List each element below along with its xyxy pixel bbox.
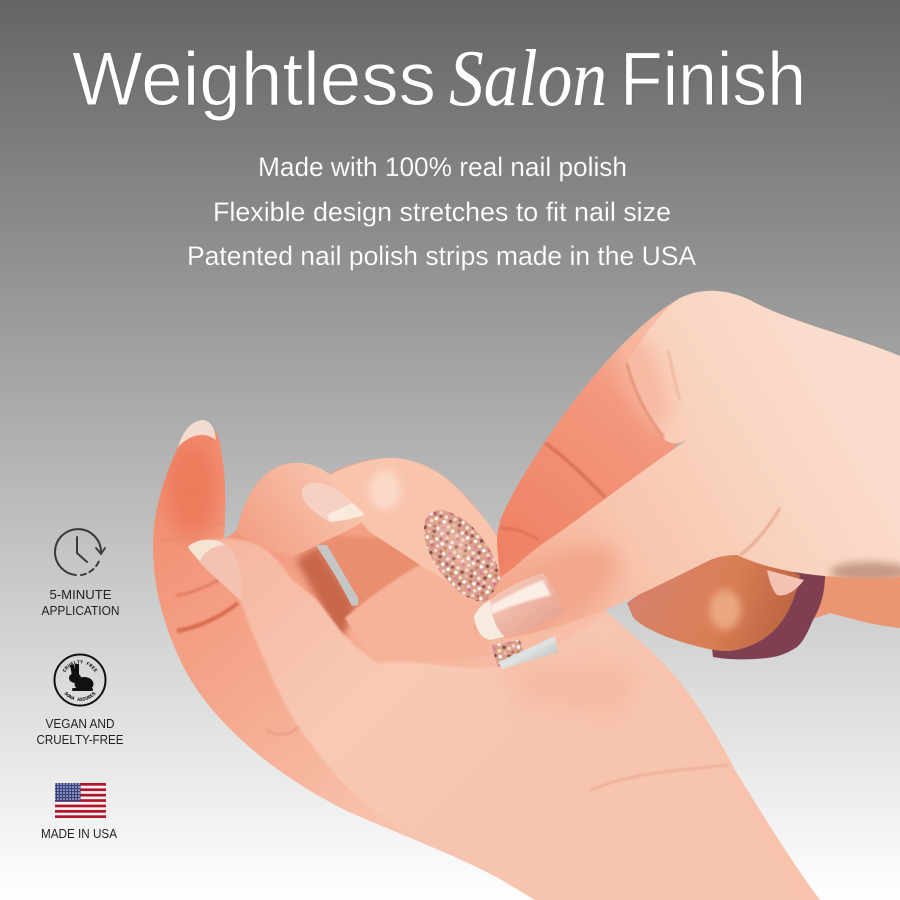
icon: American flag bbox=[55, 783, 106, 818]
front fingernail bbox=[188, 540, 241, 601]
silver nail strip bbox=[491, 636, 558, 669]
icon: cruelty-free rabbit badge: SONA ASSURES bbox=[64, 692, 96, 702]
curled finger bbox=[237, 463, 365, 557]
label: 5-minute application: 5-MINUTE bbox=[50, 587, 112, 602]
palm mound bbox=[345, 562, 495, 668]
title: Salon bbox=[449, 35, 607, 123]
upper hand back and thumb bbox=[474, 291, 900, 653]
label: made in USA: MADE IN USA bbox=[41, 826, 117, 841]
lower hand silhouette bbox=[153, 420, 820, 900]
glitter nail bbox=[409, 497, 515, 615]
icon: cruelty-free rabbit badge: CRUELTY FREE bbox=[62, 660, 98, 672]
subheading benefits text: Made with 100% real nail polish bbox=[258, 152, 627, 182]
icon: clock with dashed arrow bbox=[55, 529, 105, 575]
index fingernail bbox=[178, 420, 216, 447]
subheading benefits text: Flexible design stretches to fit nail size bbox=[213, 197, 671, 227]
glitter-nail finger bbox=[328, 458, 500, 600]
thumbnail bbox=[474, 573, 563, 640]
curled fingernail bbox=[302, 483, 365, 522]
icon: cruelty-free rabbit badge bbox=[54, 654, 106, 706]
title: Finish bbox=[620, 37, 806, 122]
highlight on knuckle bbox=[369, 470, 401, 510]
under fingers of upper hand bbox=[627, 550, 900, 659]
label: vegan and cruelty-free: VEGAN AND bbox=[46, 716, 114, 731]
title: Weightless bbox=[72, 37, 436, 122]
label: vegan and cruelty-free: CRUELTY-FREE bbox=[36, 732, 124, 747]
label: 5-minute application: APPLICATION bbox=[42, 603, 120, 618]
subheading benefits text bbox=[187, 152, 696, 271]
photo: hands applying nail strip bbox=[153, 291, 900, 900]
creases between finger and thumb bbox=[500, 443, 605, 540]
gap in fingers showing background bbox=[316, 545, 358, 606]
title bbox=[72, 35, 806, 123]
front finger and palm bbox=[194, 538, 728, 900]
upper hand index finger bbox=[497, 298, 700, 578]
subheading benefits text: Patented nail polish strips made in the USA bbox=[187, 241, 696, 271]
creases on index finger bbox=[160, 522, 238, 631]
